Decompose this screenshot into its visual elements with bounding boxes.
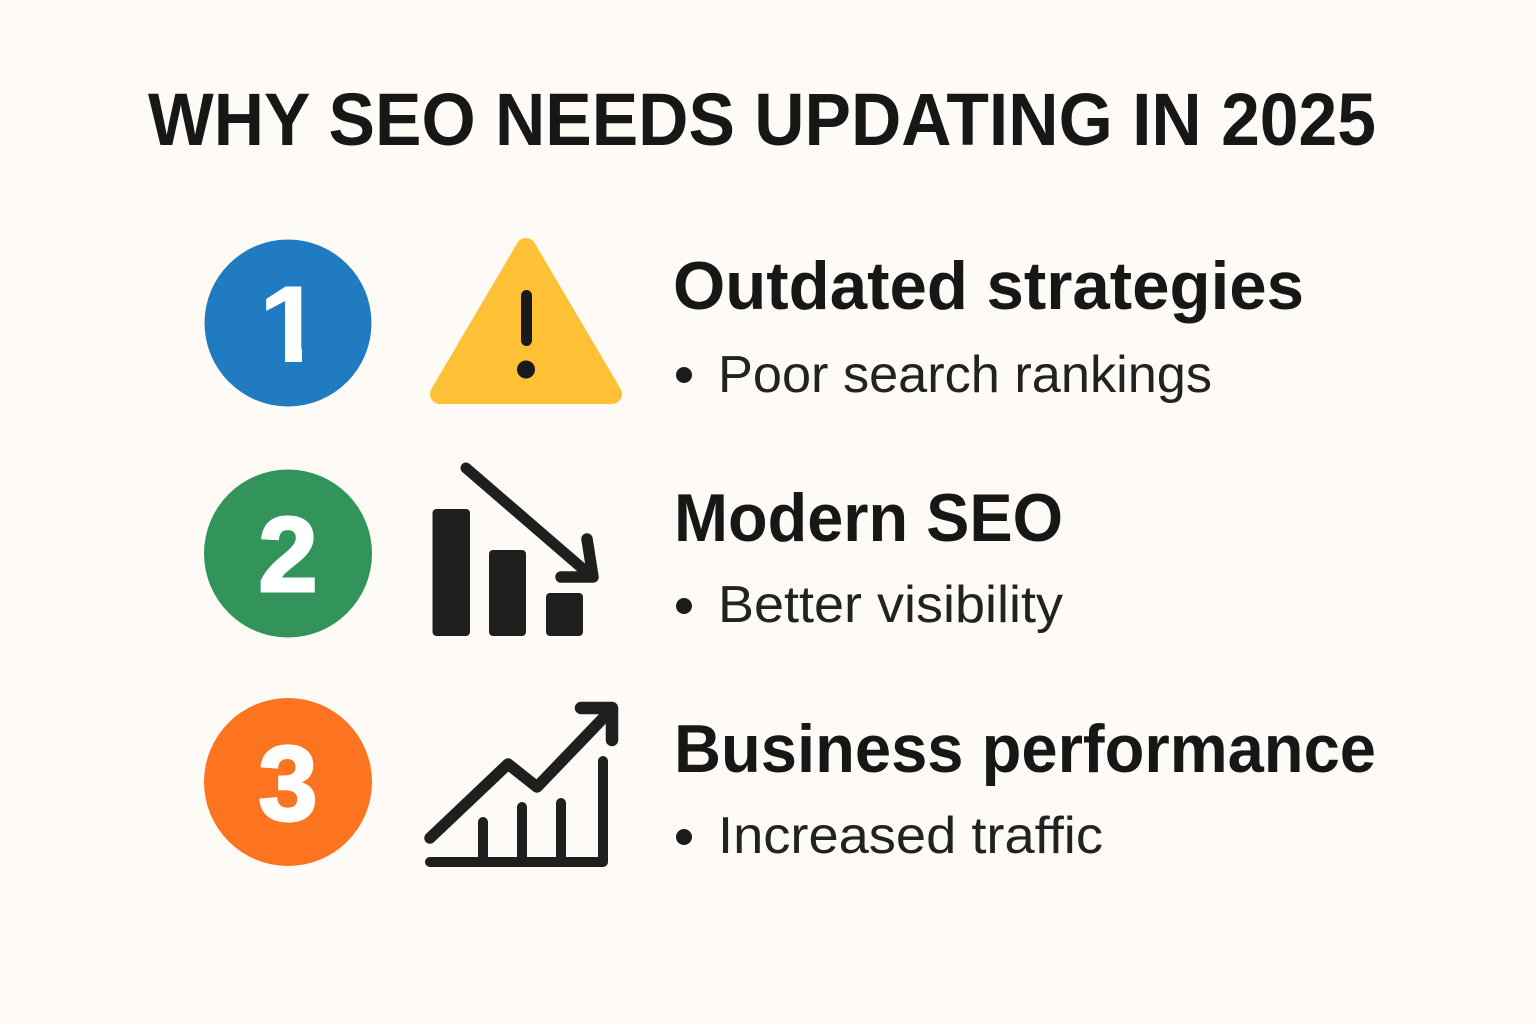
number badge 3: 3 [259,725,317,843]
title: WHY SEO NEEDS UPDATING IN 2025 [148,78,1376,161]
heading: outdated strategies: Outdated strategies [673,248,1304,324]
bullet: increased traffic: Increased traffic [718,807,1103,865]
row 2: modern SEO [204,468,1063,638]
icon: declining bar chart [432,468,593,636]
bullet: better visibility: Better visibility [718,576,1063,634]
icon: warning triangle [440,248,612,394]
number badge 3 [204,698,372,866]
bullet: poor search rankings: Poor search rankings [718,346,1212,404]
row 1: outdated strategies [204,240,1304,406]
heading: modern SEO: Modern SEO [674,480,1063,556]
number badge 1: 1 [261,266,319,384]
number badge 1 [204,240,372,406]
number badge 2 [204,470,372,638]
heading: business performance: Business performance [674,711,1376,787]
number badge 2: 2 [259,496,317,614]
icon: rising line chart [430,708,612,862]
row 3: business performance [204,698,1376,866]
